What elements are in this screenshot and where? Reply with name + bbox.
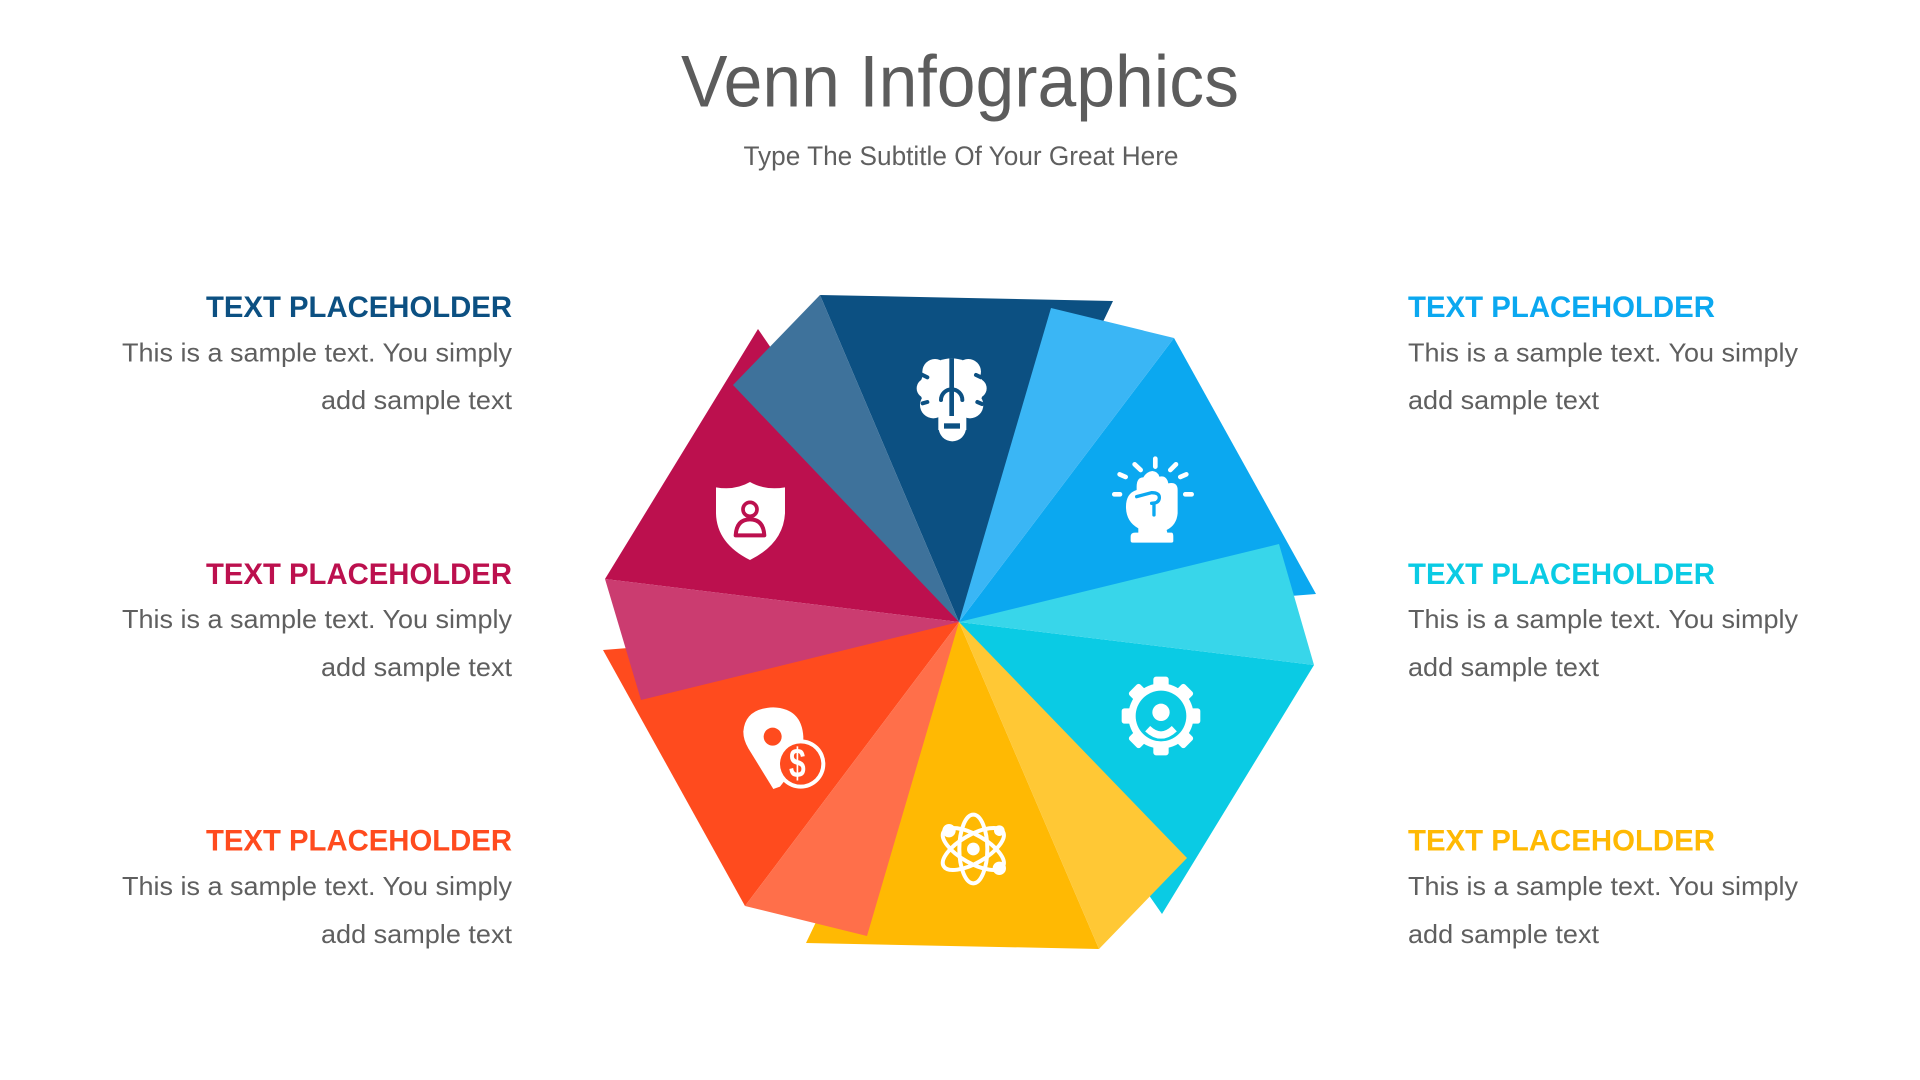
text block: bottom right: [1408, 824, 1798, 949]
text block: top right: add sample text: [1408, 385, 1600, 415]
text block: top left: add sample text: [321, 385, 513, 415]
subtitle: Type The Subtitle Of Your Great Here: [744, 141, 1178, 171]
fold: light yellow: [959, 622, 1187, 949]
text block: bottom left: This is a sample text. You simply: [122, 871, 512, 901]
text block: top left: TEXT PLACEHOLDER: [206, 291, 512, 324]
fold: pink: [605, 579, 959, 700]
text block: top right: This is a sample text. You simply: [1408, 338, 1798, 368]
segment: blue: [959, 338, 1316, 622]
fold: light orange: [745, 622, 959, 936]
icon: gear with user: [1122, 677, 1200, 755]
text block: middle left: add sample text: [321, 652, 513, 682]
icon: location pin with dollar: [743, 707, 825, 789]
segment: crimson: [605, 329, 959, 622]
text block: bottom left: TEXT PLACEHOLDER: [206, 824, 512, 858]
segment: orange: [603, 622, 959, 906]
text block: top left: [122, 291, 513, 415]
text block: top right: TEXT PLACEHOLDER: [1408, 291, 1715, 324]
text block: bottom left: [122, 824, 513, 949]
text block: middle right: add sample text: [1408, 652, 1600, 682]
text block: bottom right: This is a sample text. You simply: [1408, 871, 1798, 901]
text block: middle left: TEXT PLACEHOLDER: [206, 558, 512, 591]
text block: middle right: This is a sample text. You simply: [1408, 604, 1798, 634]
icon: atom: [937, 815, 1010, 883]
text block: middle left: This is a sample text. You simply: [122, 604, 512, 634]
text block: middle right: TEXT PLACEHOLDER: [1408, 558, 1715, 591]
text block: bottom left: add sample text: [321, 919, 513, 949]
fold: light blue: [959, 308, 1174, 622]
icon: shield with person: [716, 482, 785, 560]
text block: bottom right: add sample text: [1408, 919, 1600, 949]
text block: bottom right: TEXT PLACEHOLDER: [1408, 824, 1715, 858]
segment: cyan: [959, 622, 1314, 914]
icon: brain bulb: [917, 358, 987, 441]
segment: yellow: [806, 622, 1099, 949]
text block: top left: This is a sample text. You simply: [122, 338, 512, 368]
title: Venn Infographics: [681, 42, 1239, 122]
text block: top right: [1408, 291, 1798, 415]
segment: navy: [820, 295, 1113, 622]
icon: location pin with dollar: $: [789, 739, 806, 786]
text block: middle right: [1408, 558, 1798, 682]
text block: middle left: [122, 558, 513, 682]
fold: light cyan: [959, 544, 1314, 665]
fold: slate: [733, 295, 959, 622]
hexagon pinwheel diagram: [603, 295, 1316, 949]
icon: raised fist: [1114, 459, 1192, 543]
